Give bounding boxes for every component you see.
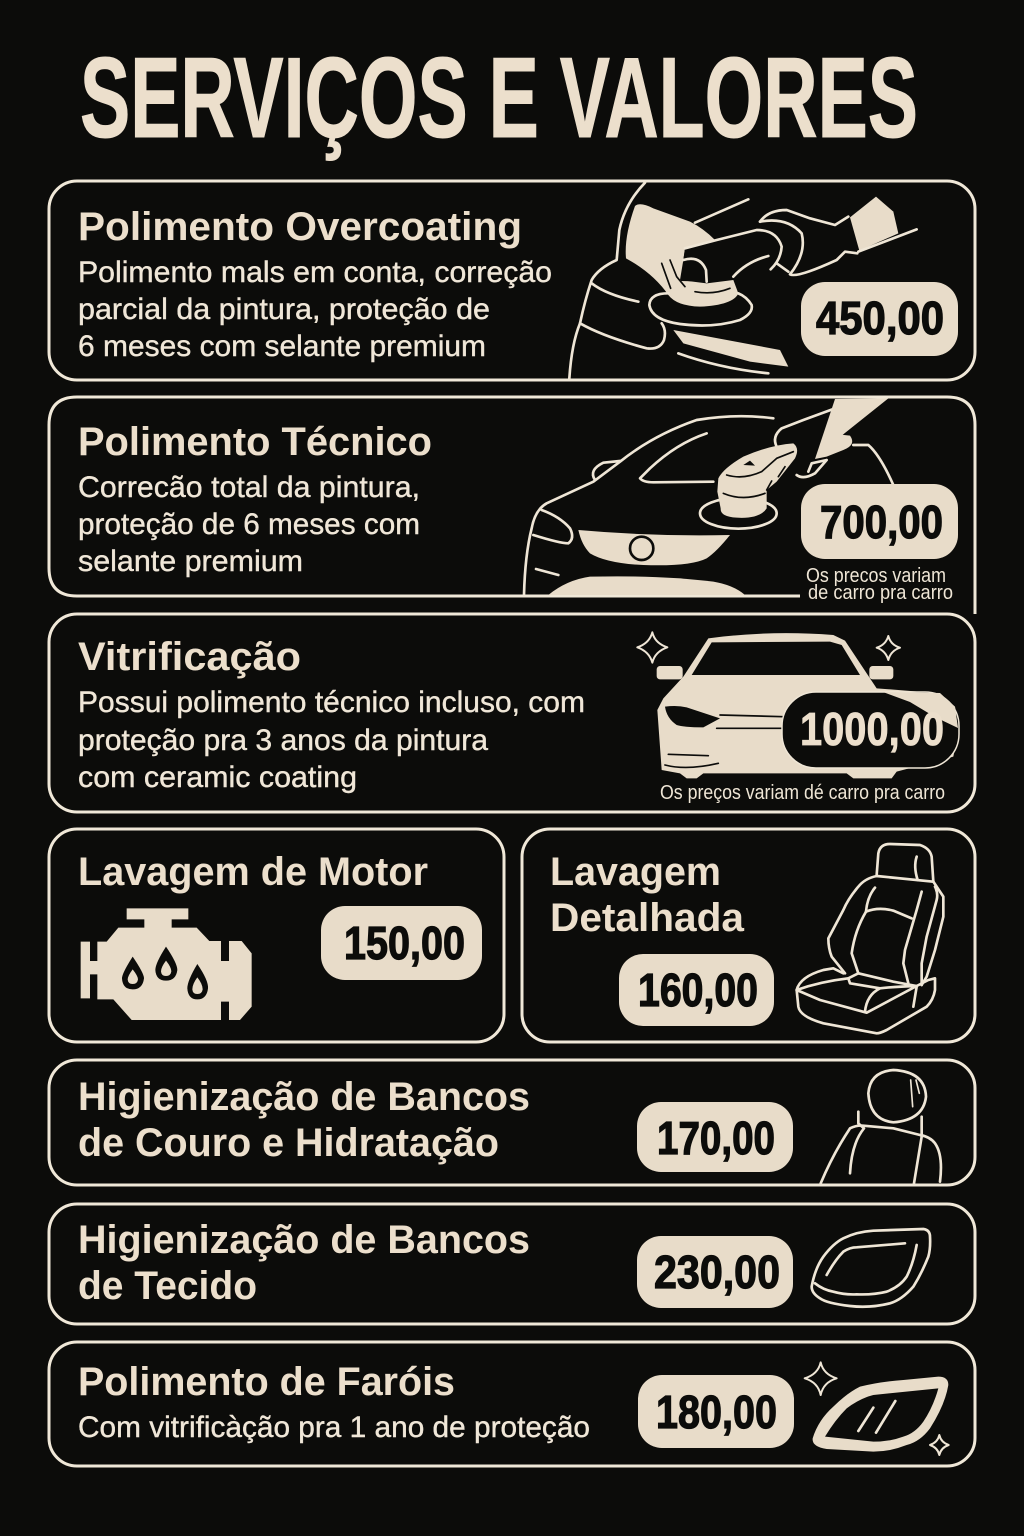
price: 230,00: 230,00 [654,1246,780,1298]
heading: Lavagem de Motor [78,850,428,894]
price: 160,00 [619,954,774,1026]
heading: Higienização de Bancos [78,1218,530,1262]
icon: engine with drops [81,908,252,1020]
description: Possui polimento técnico incluso, com [78,686,585,719]
price: 150,00: 150,00 [344,917,465,969]
description [78,686,585,794]
heading: Polimento de Faróis [78,1360,455,1404]
price: 700,00 [801,484,958,559]
price: 150,00 [321,906,482,980]
heading: Higienização de Bancos [78,1075,530,1119]
panel: Lavagem de Motor [49,829,504,1042]
heading: de Couro e Hidratação [78,1121,499,1165]
icon: hand polishing car [569,183,917,378]
panel: Polimento de Faróis [49,1342,975,1466]
price: 700,00: 700,00 [820,496,943,548]
note: price varies: Os preços variam dé carro pra carro [660,782,945,804]
description: Com vitrificàção pra 1 ano de proteção [78,1411,590,1444]
price: 180,00: 180,00 [656,1386,777,1438]
note: price varies [806,565,953,604]
heading: Polimento Técnico [78,420,432,464]
description: proteção de 6 meses com [78,508,420,541]
description: selante premium [78,545,303,578]
description: parcial da pintura, proteção de [78,293,490,326]
heading: Vitrificação [78,635,301,679]
icon: car front with sparkles [637,632,958,778]
description: Polimento mals em conta, correção [78,256,552,289]
icon: fabric seat outline [812,1229,930,1307]
description: proteção pra 3 anos da pintura [78,724,488,757]
heading [550,850,745,940]
panel: Polimento Técnico [49,397,975,614]
heading: de Tecido [78,1264,257,1308]
note: price varies: de carro pra carro [808,582,953,604]
price: 160,00: 160,00 [638,964,758,1016]
price: 450,00: 450,00 [816,292,944,344]
heading [78,1075,530,1165]
icon: polisher on car [524,398,893,595]
price: 450,00 [801,282,958,356]
icon: leather seat [821,1070,941,1183]
panel: Vitrificação [49,614,975,812]
description [78,256,552,363]
panel: Polimento Overcoating [49,181,975,380]
price: 170,00: 170,00 [657,1112,775,1164]
heading: Polimento Overcoating [78,205,522,249]
description: 6 meses com selante premium [78,330,486,363]
panel: Higienização de Bancos de Couro [49,1060,975,1185]
panel: Lavagem Detalhada [522,829,975,1042]
price: 180,00 [638,1375,794,1448]
price: 230,00 [637,1236,793,1308]
heading: Lavagem [550,850,721,894]
heading: Detalhada [550,896,745,940]
description [78,471,420,578]
icon: headlight with sparkles [805,1362,949,1455]
heading [78,1218,530,1308]
price: 170,00 [637,1102,793,1172]
note: price varies: Os precos variam [806,565,946,587]
icon: car seat [797,844,943,1033]
description: com ceramic coating [78,761,357,794]
price: 1000,00 [782,692,959,768]
price: 1000,00: 1000,00 [800,703,944,755]
panel: Higienização de Bancos de Tecido [49,1204,975,1324]
description: Correcão total da pintura, [78,471,420,504]
